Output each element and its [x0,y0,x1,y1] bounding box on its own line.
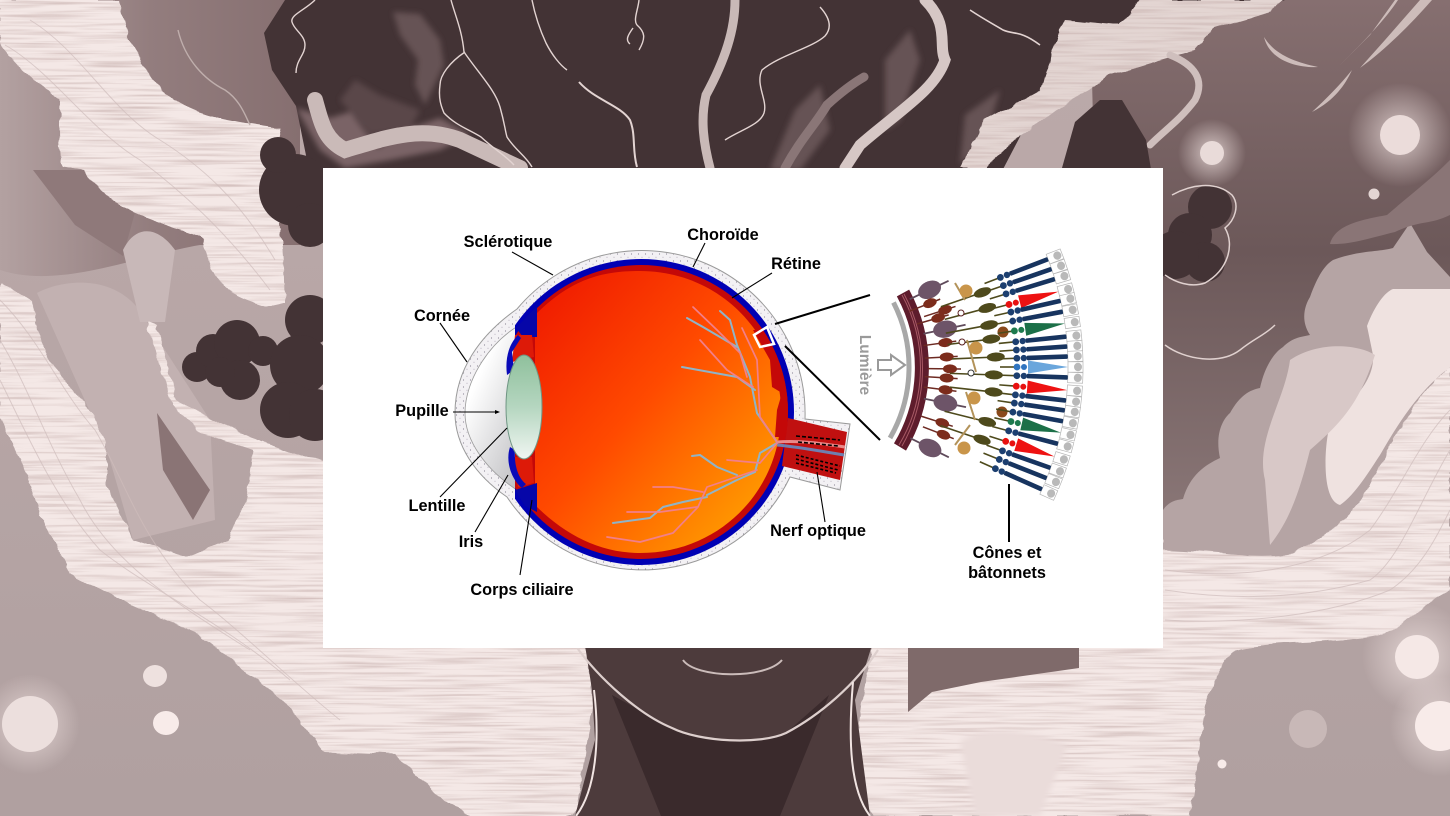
eye cross-section diagram [455,251,850,570]
highlighted retina square [754,327,774,347]
label: Cônes et bâtonnets: Cônes et [973,544,1042,562]
icon: light arrow [878,355,905,375]
choroid [488,259,794,565]
pigment band [890,293,922,447]
ganglion cells [906,273,968,465]
lens [506,355,542,459]
portrait: chin and neck [575,645,878,816]
label: Corps ciliaire: Corps ciliaire [470,581,574,599]
dark mauve patches in the dark band [296,12,1000,170]
ciliary body [515,306,537,512]
darker cloud lobe top right [1330,160,1450,244]
bipolar cells [939,285,1005,447]
left upper mauve area [0,0,300,276]
anterior chamber [465,322,540,492]
label: Iris: Iris [459,533,483,551]
label: Nerf optique: Nerf optique [770,522,866,540]
left dark wedges [33,170,137,256]
streaky cloud right [1263,346,1375,545]
macula fold [753,330,788,437]
horizontal and amacrine cells [955,283,1008,454]
iris [506,335,534,488]
retina detail fan [856,249,1083,500]
label: Cornée: Cornée [414,307,470,325]
light label: Lumière [856,335,873,396]
left centre lighter wash [37,283,215,540]
dark hair clusters right [1060,100,1232,282]
label: Pupille: Pupille [395,402,449,420]
bottom right mauve cutout [908,648,1079,712]
wisp branches [315,0,1199,168]
retinal blood vessels [607,307,777,542]
vitreous body [535,271,781,553]
label: Choroïde: Choroïde [687,226,759,244]
thin hair lines [178,0,1040,167]
label: Sclérotique: Sclérotique [464,233,552,251]
light puff right [1326,289,1450,505]
sclera and cornea [455,251,850,570]
rods and cones [978,249,1083,500]
retina [494,265,788,559]
right lobed cloud [1163,223,1450,620]
optic nerve [777,418,847,480]
label: Lentille: Lentille [408,497,466,515]
right upper mauve area [1090,0,1450,560]
label: Rétine: Rétine [771,255,821,273]
dark hair clusters left [182,137,341,441]
right blades [1264,0,1432,112]
dark top band [264,0,1285,175]
leader lines [440,243,1009,575]
white panel [323,168,1163,648]
bottom right pale patch [960,731,1068,816]
label: Cônes et bâtonnets: bâtonnets [968,564,1046,582]
